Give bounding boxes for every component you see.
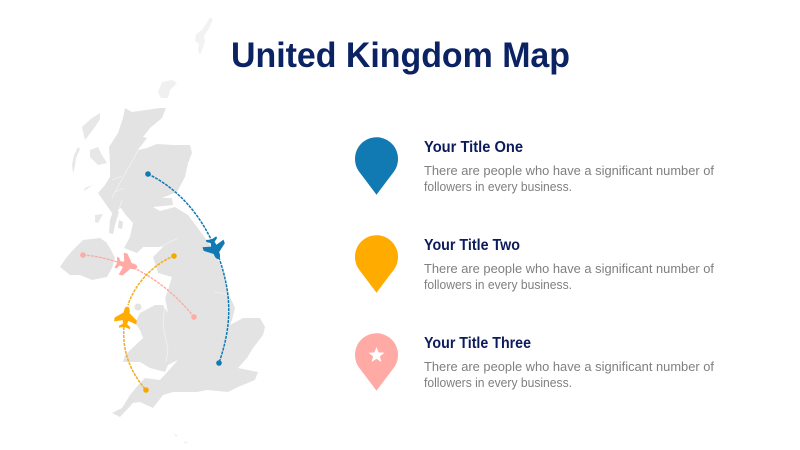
map: Orkney — [158, 80, 177, 98]
icon: orange pin — [355, 235, 398, 293]
text two — [424, 262, 715, 292]
map: Northern Ireland — [60, 238, 115, 280]
map: Great Britain mainland — [98, 108, 265, 417]
icon: blue plane — [201, 234, 229, 263]
text one: There are people who have a significant number of — [424, 164, 715, 178]
text three — [424, 360, 715, 390]
map: Hebrides — [72, 113, 107, 223]
map: Channel Islands — [174, 434, 188, 444]
map: Anglesey — [134, 304, 142, 310]
text two: There are people who have a significant number of — [424, 262, 715, 276]
map: Kintyre — [109, 205, 119, 234]
icon: blue pin — [355, 137, 398, 195]
route: pink — [80, 251, 197, 320]
text one — [424, 164, 715, 194]
text one: followers in every business. — [424, 180, 572, 194]
item two — [355, 235, 715, 293]
route: blue — [145, 171, 229, 366]
item one — [355, 137, 715, 195]
icon: pink plane — [113, 251, 140, 278]
heading one: Your Title One — [424, 139, 523, 156]
river and loch lines — [112, 147, 226, 362]
heading three: Your Title Three — [424, 335, 531, 352]
heading two: Your Title Two — [424, 237, 520, 254]
icon: orange plane — [113, 305, 139, 330]
icon: pink pin with star — [355, 333, 398, 391]
route: orange — [113, 253, 177, 393]
text two: followers in every business. — [424, 278, 572, 292]
item three — [355, 333, 715, 391]
text three: There are people who have a significant number of — [424, 360, 715, 374]
text three: followers in every business. — [424, 376, 572, 390]
map: United Kingdom — [60, 17, 265, 444]
map: Shetland — [195, 17, 213, 55]
map: Arran — [118, 220, 123, 229]
title: United Kingdom Map — [231, 36, 570, 75]
